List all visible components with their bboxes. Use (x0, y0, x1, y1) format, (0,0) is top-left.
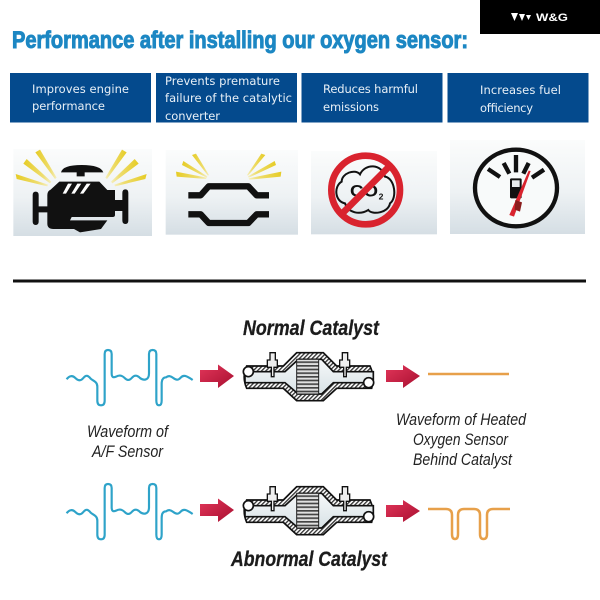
label: improves engine performance (10, 73, 151, 122)
label: improves engine performance: Improves engine (32, 82, 129, 96)
arrow: into catalyst (200, 364, 234, 388)
panel: benefit labels (10, 73, 588, 123)
heading: normal catalyst: Normal Catalyst (243, 316, 380, 340)
title: Performance after installing our oxygen sensor: (12, 27, 468, 54)
caption: heated oxygen sensor waveform: Waveform of Heated (396, 411, 527, 429)
label: reduces harmful emissions: emissions (323, 100, 379, 114)
logo text: W&G (536, 12, 568, 24)
caption: heated oxygen sensor waveform: Behind Catalyst (413, 451, 513, 469)
waveform: heated sensor dips (428, 509, 510, 539)
caption: A/F sensor waveform: A/F Sensor (91, 443, 164, 461)
waveform: A/F sensor normal (67, 350, 193, 405)
caption: A/F sensor waveform (87, 423, 170, 461)
diagram: abnormal catalyst row (67, 484, 510, 539)
icon: logo mark (511, 13, 531, 21)
icon: fuel gauge (450, 140, 585, 234)
diagram: normal catalyst row (67, 350, 509, 405)
icon: catalytic converter (166, 150, 298, 235)
divider (13, 280, 586, 282)
icon: catalyst cutaway (243, 353, 374, 401)
heading: abnormal catalyst: Abnormal Catalyst (230, 547, 388, 571)
icon: abnormal catalyst cutaway (243, 487, 374, 535)
label: prevents premature failure: converter (165, 109, 220, 123)
label: reduces harmful emissions (302, 73, 442, 122)
label: reduces harmful emissions: Reduces harmful (323, 82, 418, 96)
caption: A/F sensor waveform: Waveform of (87, 423, 170, 441)
waveform: A/F sensor abnormal (67, 484, 193, 539)
waveform: heated sensor flat (428, 373, 509, 375)
label: prevents premature failure: failure of the catalytic (165, 91, 292, 105)
caption: heated oxygen sensor waveform (396, 411, 527, 469)
icon: no CO2 (311, 151, 437, 234)
icon: engine (13, 149, 152, 236)
arrow: out of abnormal catalyst (386, 500, 420, 522)
label: increases fuel efficiency: Increases fuel (480, 83, 561, 97)
label: prevents premature failure (156, 73, 297, 123)
logo badge (480, 0, 600, 34)
icon: no CO2: CO (350, 182, 378, 201)
icon: no CO2: 2 (379, 192, 384, 202)
arrow: into abnormal catalyst (200, 498, 234, 522)
arrow: out of catalyst (386, 365, 420, 388)
label: increases fuel efficiency (448, 73, 588, 122)
label: increases fuel efficiency: officiency (480, 101, 533, 115)
label: prevents premature failure: Prevents premature (165, 74, 280, 88)
caption: heated oxygen sensor waveform: Oxygen Sensor (413, 431, 509, 449)
label: improves engine performance: performance (32, 99, 105, 113)
